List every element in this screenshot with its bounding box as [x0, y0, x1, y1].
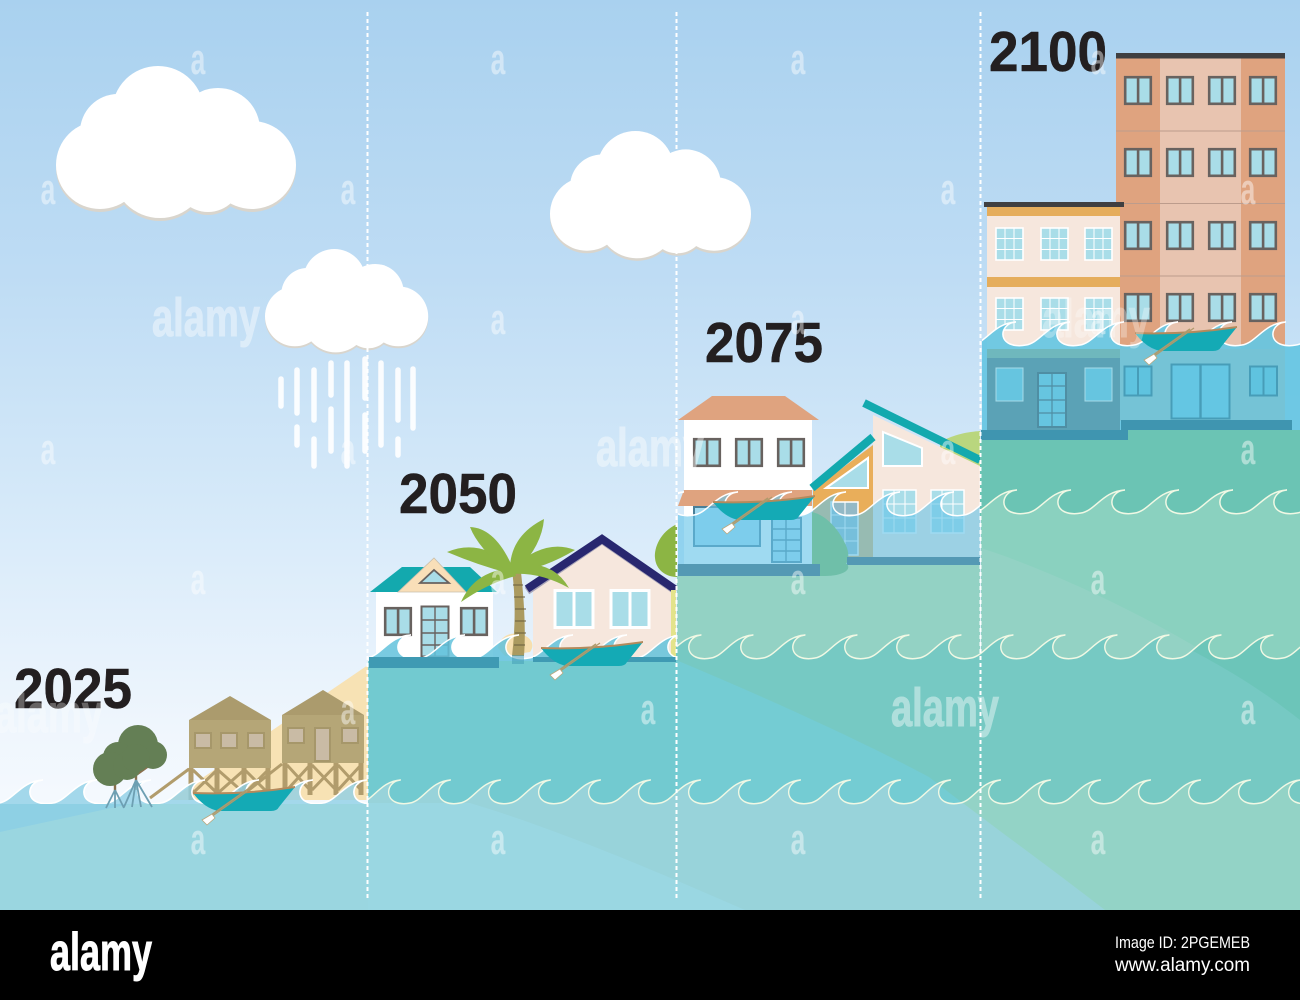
water 2025 — [0, 779, 368, 910]
scene 2050: beach house, palm tree and cottage — [370, 519, 677, 662]
bush 2075 — [812, 512, 848, 576]
watermark words: alamy — [891, 678, 999, 738]
boat 2100 — [1135, 326, 1237, 365]
base bands — [369, 420, 1292, 668]
large cloud — [56, 66, 296, 221]
sand slope — [170, 665, 368, 800]
watermark letters: a — [491, 294, 506, 344]
footer logo: alamy — [50, 923, 152, 982]
watermark letters: a — [191, 814, 206, 864]
watermark letters: a — [341, 424, 356, 474]
image id: Image ID: 2PGEMEB — [1115, 933, 1250, 952]
water 2100 — [982, 321, 1300, 430]
wave line row 2050 — [368, 779, 1300, 804]
boat 2075 — [713, 495, 815, 534]
ground band: upper row 2100 — [981, 492, 1300, 658]
watermark letters: a — [1241, 424, 1256, 474]
hut two — [245, 690, 364, 795]
year label 2050: 2050 — [399, 462, 517, 526]
hut one — [150, 696, 271, 800]
green bush — [655, 524, 677, 577]
bush base 2075 — [820, 564, 848, 576]
watermark letters: a — [1091, 34, 1106, 84]
watermark letters: a — [41, 164, 56, 214]
mangrove canopy — [93, 725, 167, 794]
footer bar — [0, 910, 1300, 1000]
watermark words: alamy — [152, 288, 260, 348]
scene 2100: tall apartment and low-rise buildings — [984, 53, 1285, 358]
watermark letters: a — [1241, 164, 1256, 214]
scene 2025: stilt huts and mangrove — [93, 665, 368, 800]
palm tree — [447, 519, 575, 656]
cottage — [527, 539, 676, 662]
year label 2025: 2025 — [14, 657, 132, 721]
watermark letters: a — [1241, 684, 1256, 734]
ground column 2050 — [368, 661, 677, 806]
watermark letters: a — [791, 294, 806, 344]
watermark letters: a — [791, 554, 806, 604]
watermark letters: a — [791, 814, 806, 864]
rain cloud — [265, 249, 428, 354]
watermark letters: a — [791, 34, 806, 84]
watermark letters: a — [191, 34, 206, 84]
watermark letters: a — [191, 554, 206, 604]
year label 2100: 2100 — [989, 20, 1107, 84]
site url: www.alamy.com — [1114, 955, 1250, 976]
flooded low-rise floor — [987, 349, 1120, 430]
watermark letters: a — [641, 684, 656, 734]
flooded floors 2100 — [987, 349, 1285, 430]
watermark letters: a — [341, 164, 356, 214]
watermark letters — [41, 34, 1256, 864]
middle cloud — [550, 131, 751, 261]
watermark letters: a — [1091, 294, 1106, 344]
watermark words — [0, 288, 1150, 744]
water 2075 — [678, 491, 980, 564]
watermark letters: a — [1091, 554, 1106, 604]
watermark letters: a — [491, 34, 506, 84]
low-rise building — [984, 202, 1124, 357]
watermark letters: a — [641, 164, 656, 214]
beach house — [370, 558, 497, 662]
watermark letters: a — [491, 554, 506, 604]
ground column 2075 top — [677, 565, 980, 665]
watermark letters: a — [941, 164, 956, 214]
mangrove roots — [106, 780, 152, 808]
rain streaks — [281, 359, 413, 466]
ground column 2100 top — [980, 430, 1300, 520]
two storey house — [678, 396, 819, 566]
watermark letters: a — [1091, 814, 1106, 864]
wave line row 2075 — [677, 634, 1300, 660]
watermark words: alamy — [1042, 289, 1150, 349]
ground band: lower row — [368, 775, 1300, 910]
boat 2050 — [541, 641, 643, 680]
watermark letters: a — [491, 814, 506, 864]
tall apartment building — [1116, 53, 1285, 358]
year label 2075: 2075 — [705, 311, 823, 375]
modern house — [812, 403, 980, 558]
watermark letters: a — [341, 684, 356, 734]
flooded apartment floor — [1120, 349, 1285, 421]
watermark letters: a — [941, 424, 956, 474]
watermark letters: a — [41, 424, 56, 474]
boat 2025 — [193, 786, 295, 825]
dashed era dividers — [368, 12, 980, 898]
ground band: middle row — [676, 638, 1300, 803]
wave line row 2100 — [981, 489, 1300, 514]
light green hill — [940, 431, 980, 520]
watermark words: alamy — [596, 418, 704, 478]
scene 2075: two storey house and modern house — [678, 396, 980, 566]
water 2050 — [369, 634, 677, 661]
